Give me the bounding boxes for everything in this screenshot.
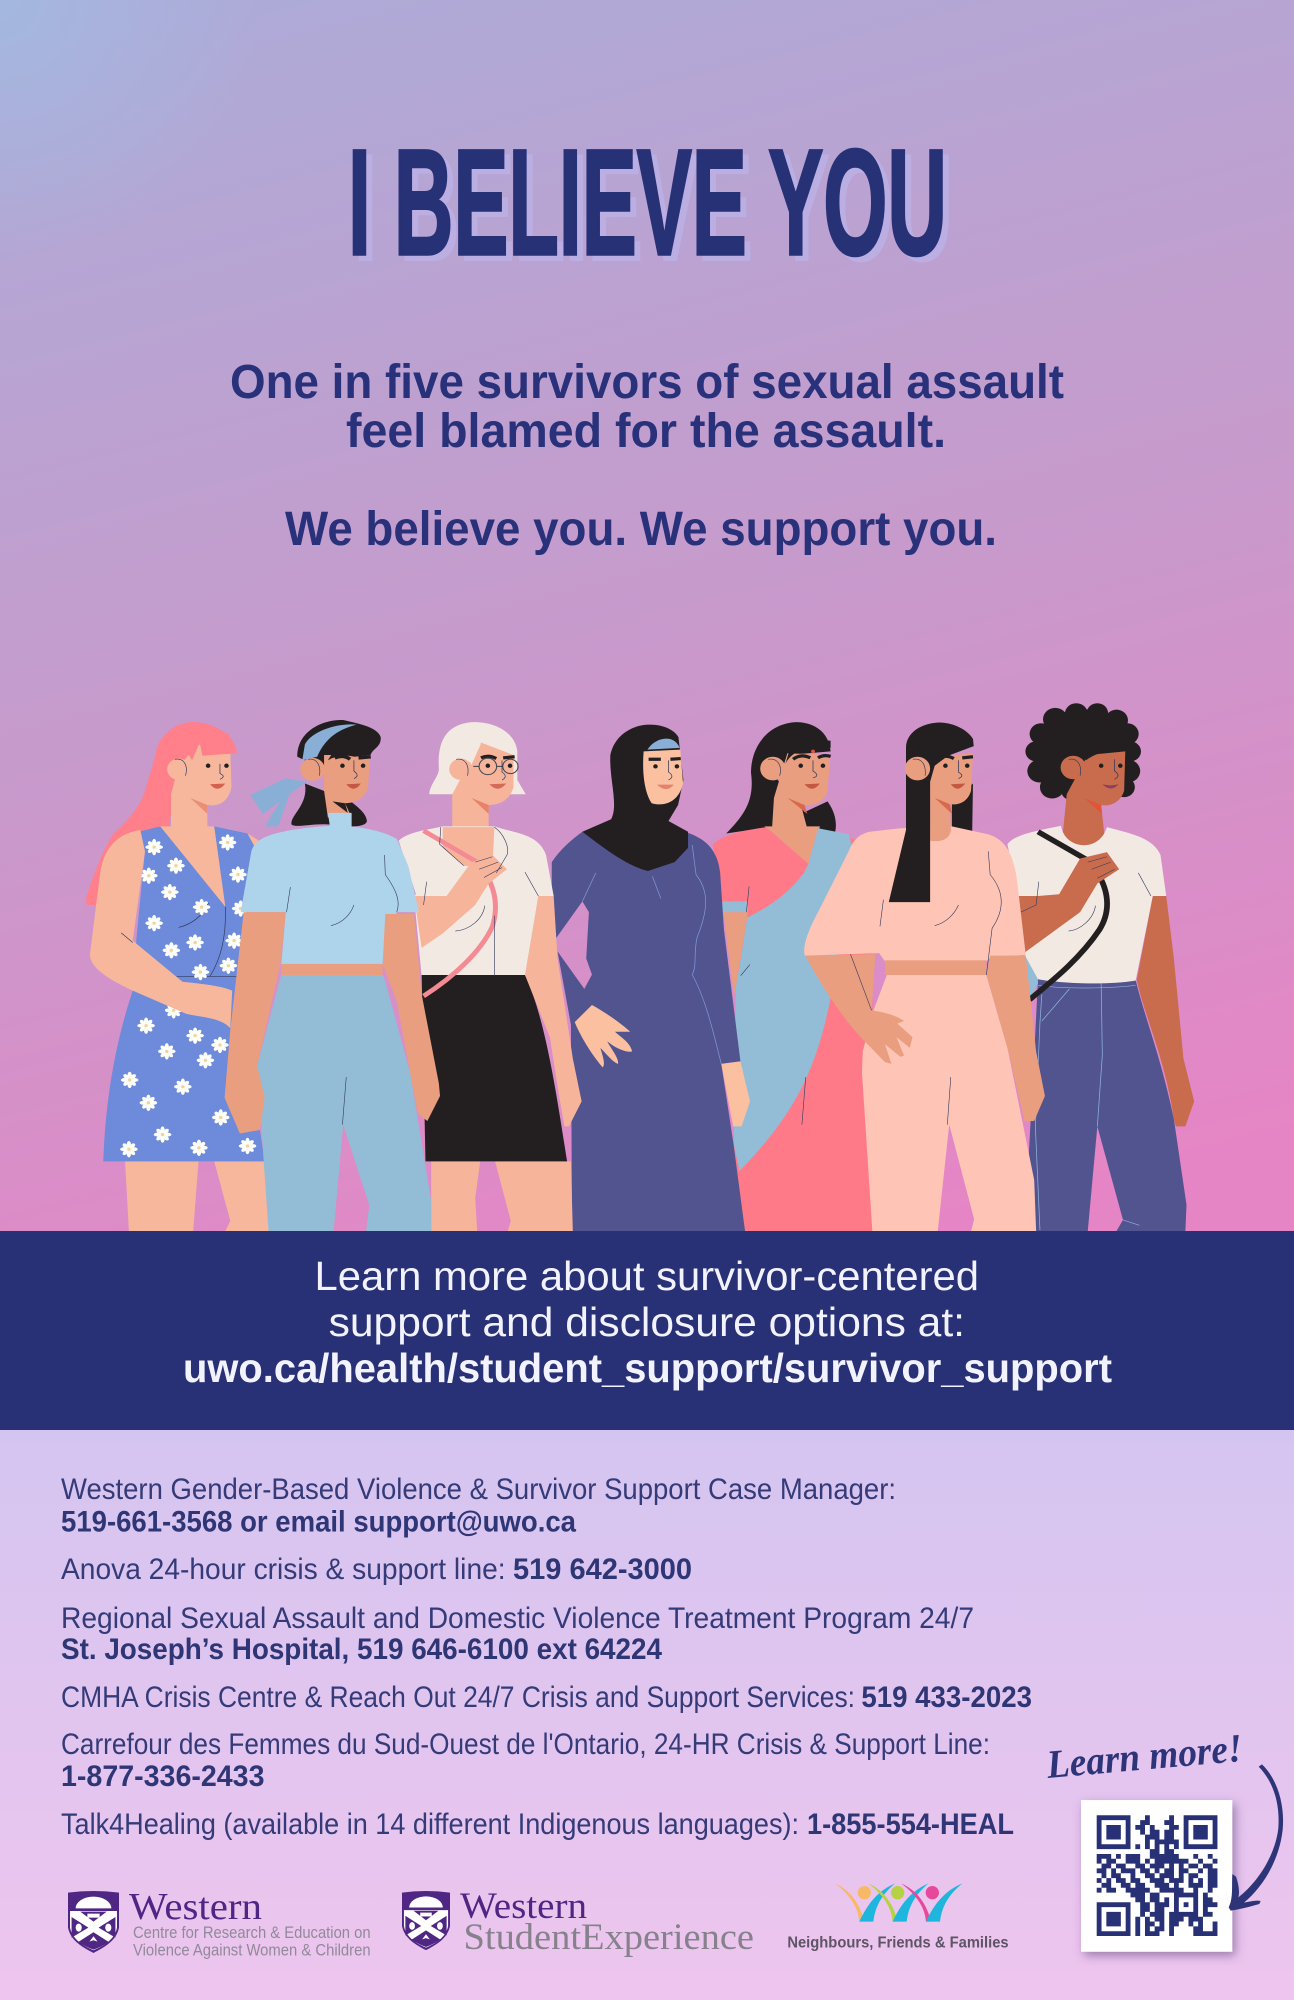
logo: Western Centre for Research and Education: Violence Against Women & Children [133,1942,371,1960]
contact: St. Joseph's treatment program [61,1602,974,1666]
contact: St. Joseph's treatment program: Regional Sexual Assault and Domestic Violence Treatment Program 24/7 [61,1602,974,1635]
figure 6: woman in peach with long black hair [804,723,1045,1231]
figure 5: woman in sari [713,722,877,1231]
contact: Carrefour des Femmes: Carrefour des Femmes du Sud-Ouest de l'Ontario, 24-HR Crisis & Support Line: [61,1728,990,1761]
arrow: curved arrow pointing to QR code [1229,1764,1283,1911]
figure 4: woman in hijab [552,725,750,1231]
figure 1: woman with pink hair in daisy dress [86,722,270,1231]
logo: Neighbours, Friends and Families [787,1883,1009,1951]
contact: Western case manager [61,1473,896,1539]
contact: Carrefour des Femmes: 1-877-336-2433 [61,1760,264,1793]
logo: Western Centre for Research and Education: Western [129,1886,262,1928]
contact: Western case manager: 519-661-3568 or email support@uwo.ca [61,1506,576,1539]
callout: Learn more!: Learn more! [1044,1725,1244,1787]
logo: Western Student Experience: Western [460,1886,587,1927]
illustration: group of seven women [86,703,1194,1231]
contact: Anova: 519 642-3000 [513,1553,692,1586]
statement: one in five survivors [230,356,1064,458]
figure 2: woman in blue top with headband [225,720,440,1231]
contact: Anova: Anova 24-hour crisis & support line: [61,1553,506,1586]
banner: learn more: uwo.ca/health/student_support/survivor_support [183,1345,1112,1391]
QR code [1081,1800,1232,1952]
contact: St. Joseph's treatment program: St. Joseph’s Hospital, 519 646-6100 ext 64224 [61,1633,662,1666]
contact: Talk4Healing: 1-855-554-HEAL [807,1808,1014,1841]
banner: learn more: Learn more about survivor-centered [314,1253,979,1299]
banner: learn more [0,1231,1294,1430]
contact: CMHA: 519 433-2023 [861,1681,1032,1714]
contact: Western case manager: Western Gender-Based Violence & Survivor Support Case Manager: [61,1473,896,1506]
background gradient [0,0,1294,1232]
logo: Western Student Experience [402,1886,754,1958]
statement: one in five survivors: One in five survivors of sexual assault [230,356,1064,409]
contact: Carrefour des Femmes [61,1728,990,1793]
contact: Talk4Healing: Talk4Healing (available in 14 different Indigenous languages): [61,1808,799,1841]
lower panel background [0,1430,1294,2000]
figure 3: woman with white hair and glasses [399,722,582,1231]
contact list [61,1473,1032,1841]
logo: Western Centre for Research and Education: Centre for Research & Education on [133,1924,371,1942]
title: I BELIEVE YOU [348,118,953,292]
statement: we believe you: We believe you. We support you. [285,503,997,556]
logo: Western Student Experience: StudentExperience [464,1917,754,1958]
banner: learn more: support and disclosure options at: [329,1299,965,1345]
contact: CMHA: CMHA Crisis Centre & Reach Out 24/7 Crisis and Support Services: [61,1681,855,1714]
statement: one in five survivors: feel blamed for the assault. [346,405,946,458]
logo: Neighbours, Friends and Families: Neighbours, Friends & Families [787,1934,1009,1951]
logo: Western Centre for Research and Education [68,1886,371,1960]
figure 7: woman with curly hair [1007,703,1194,1231]
